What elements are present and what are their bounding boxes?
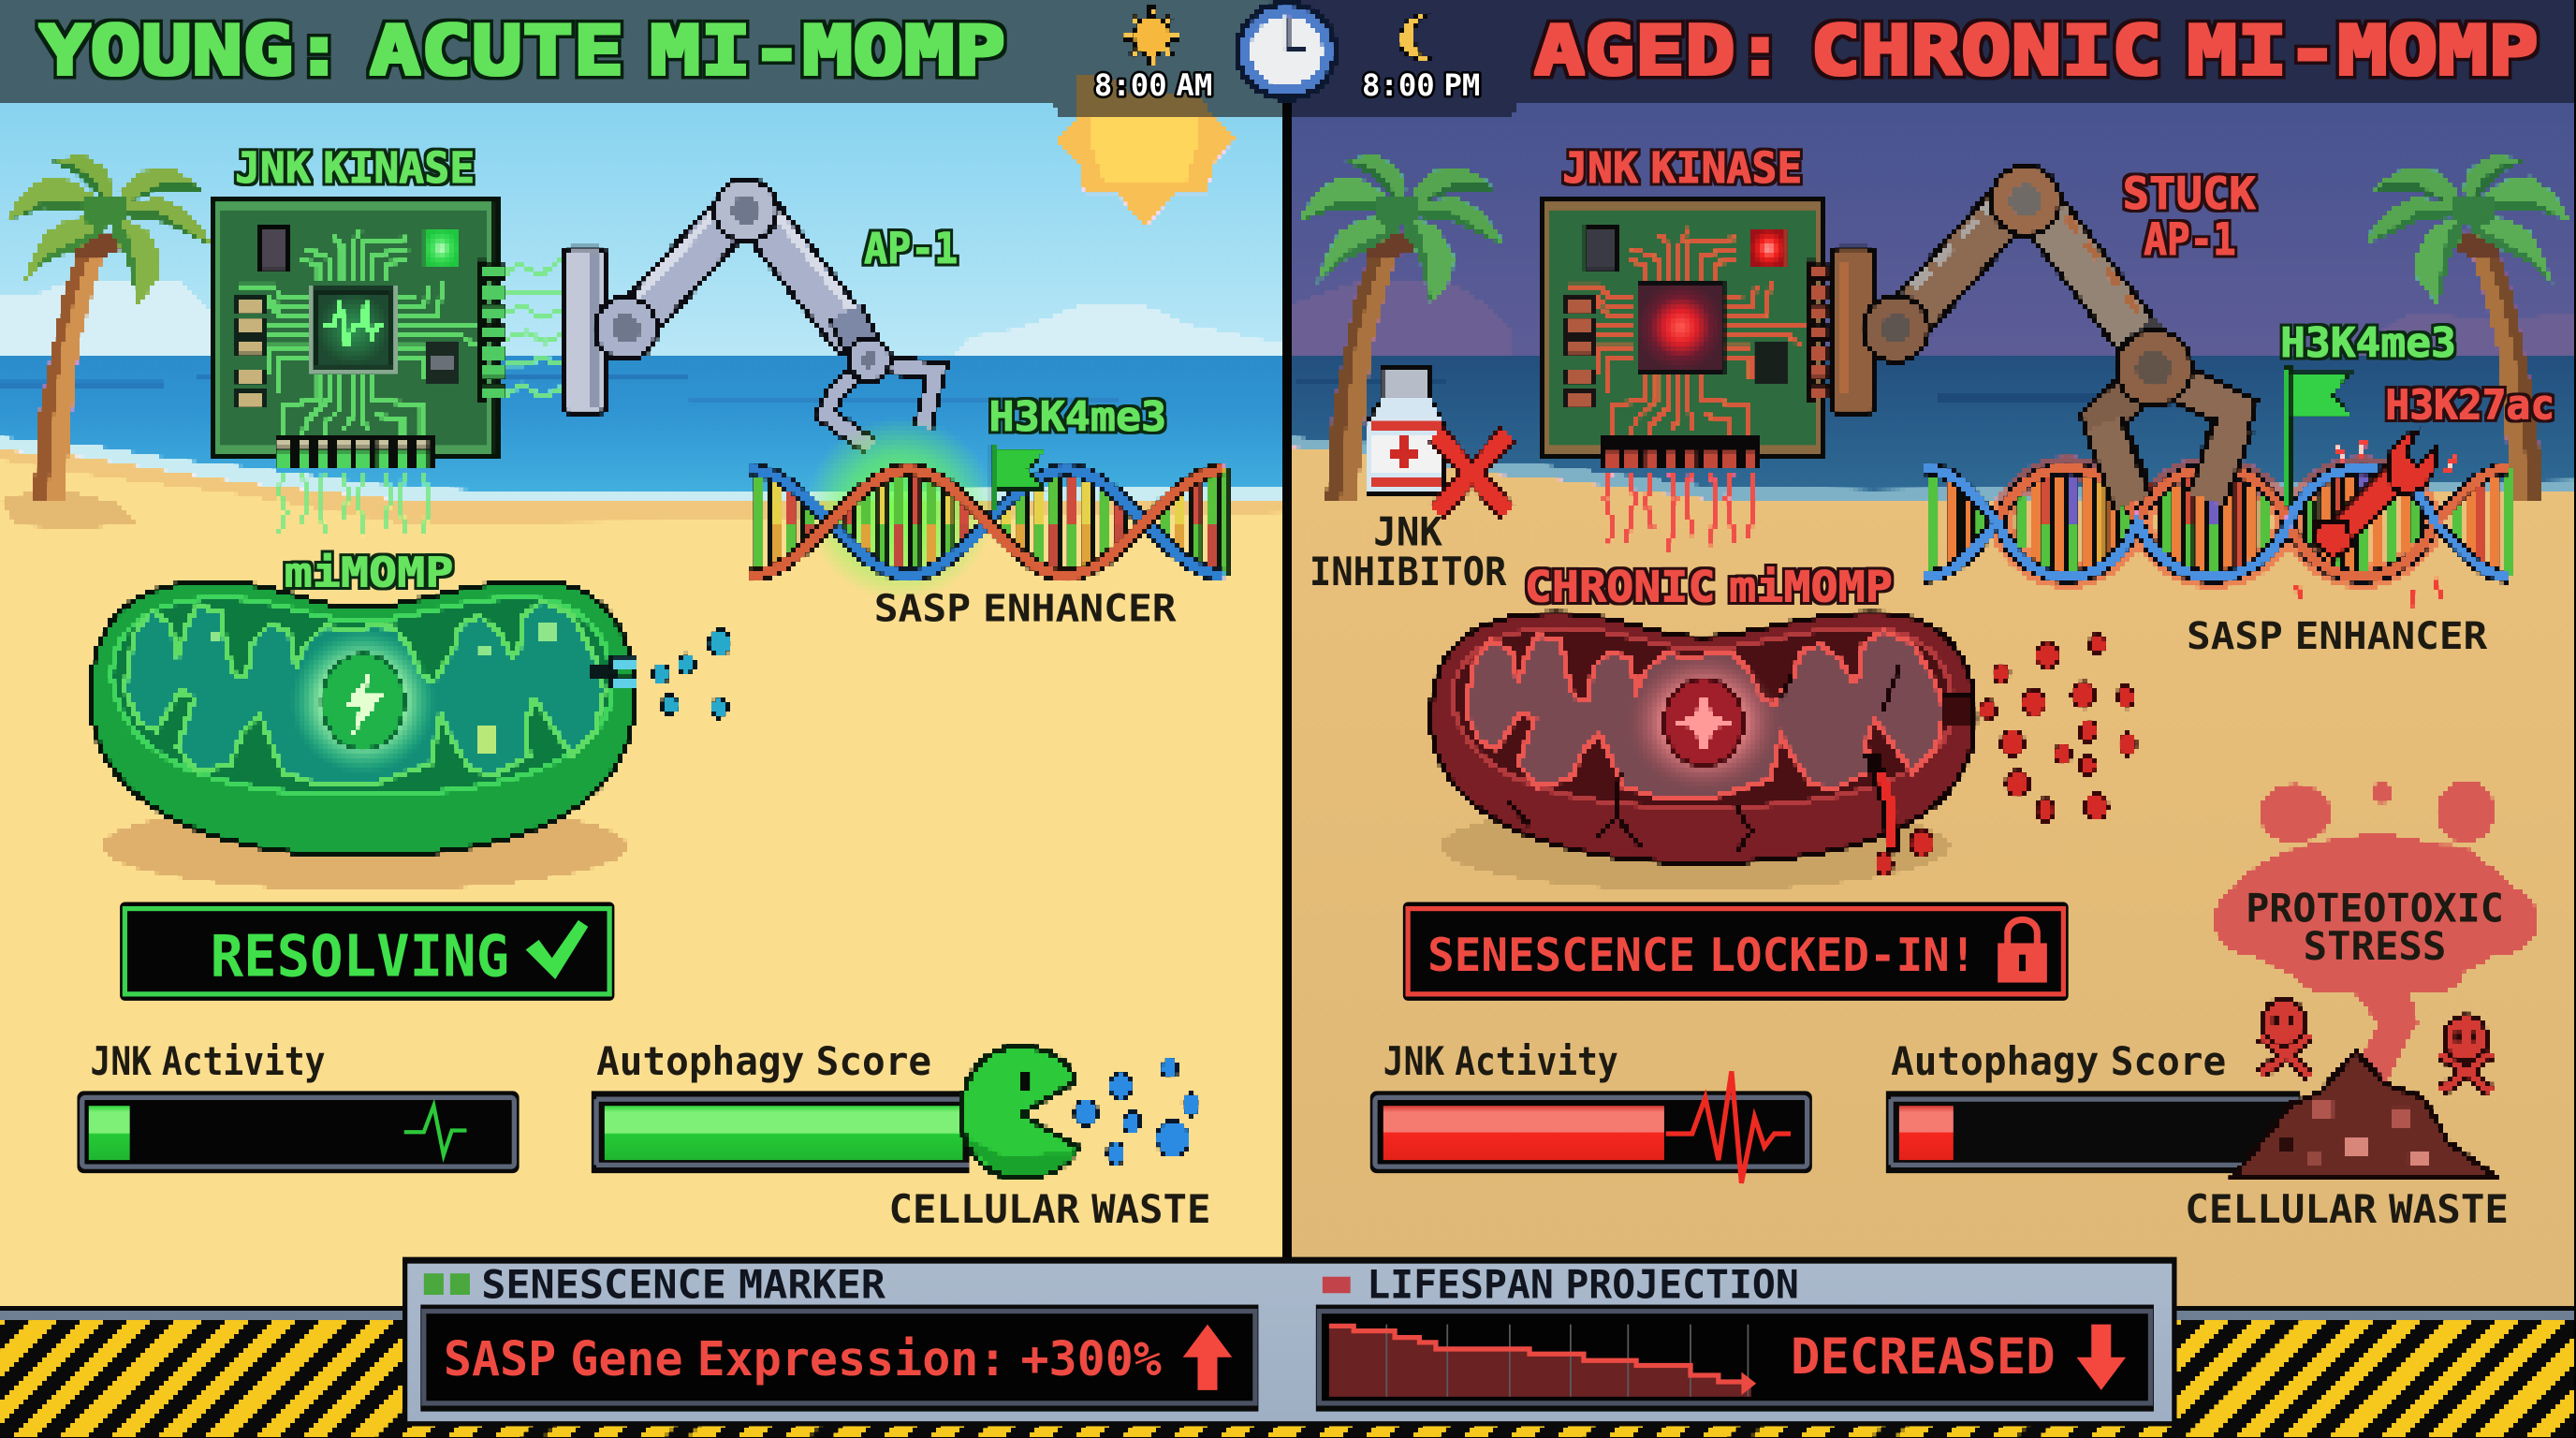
status badge: resolving: RESOLVING [211,924,509,990]
label: SASP enhancer young: SASP ENHANCER [874,586,1177,630]
label: autophagy young: Autophagy Score [596,1038,931,1084]
pixel-art overlay above gauges [961,999,2497,1178]
mtDNA particles aged [1876,634,2136,875]
chart: DNA SASP enhancer young [751,418,1224,601]
label: JNK kinase young: JNK KINASE [235,143,475,193]
label: chronic miMOMP: CHRONIC miMOMP [1525,562,1893,611]
time label: morning: 8:00 AM [1094,69,1212,103]
title: aged: AGED: CHRONIC MI-MOMP [1534,11,2539,90]
icon: lifespan small flag [1323,1277,1351,1293]
icon: green pacman [961,1047,1077,1178]
label: cloud text proteotoxic stress [2246,886,2504,969]
status badge: senescence locked-in: SENESCENCE LOCKED-IN! [1427,928,1976,982]
label: H3K4me3 young: H3K4me3 [989,393,1166,441]
icon: small sun [1123,7,1179,66]
icon: padlock [1998,919,2047,983]
sun seen through header [1076,76,1214,118]
panel: bottom console [402,1257,2177,1426]
panel: aged beach background [1284,98,2576,1308]
screen: SASP expression [420,1305,1258,1412]
screen: lifespan projection [1316,1305,2154,1412]
heading: senescence marker: SENESCENCE MARKER [481,1262,886,1308]
icon: moon [1399,13,1432,61]
label: JNK inhibitor: JNK [1373,509,1443,555]
header bar: young [0,0,1284,118]
icon: H3K4me3 flag young [990,444,1045,509]
icon: JNK inhibitor vial with red X [1367,368,1508,513]
label: cellular waste young: CELLULAR WASTE [889,1186,1211,1232]
label: autophagy aged: Autophagy Score [1891,1038,2226,1084]
icon: checkmark [526,920,588,979]
icon: skull left [2261,999,2310,1075]
gauge: autophagy aged [1886,1091,2300,1173]
gauge: autophagy young [592,1091,970,1173]
hazard stripes footer [0,1305,2576,1438]
label: miMOMP: miMOMP [285,550,453,597]
label: stuck AP-1 [2123,169,2256,266]
icon: H3K4me3 flag aged [2284,368,2351,506]
label: JNK inhibitor: INHIBITOR [1310,549,1507,594]
icon: green JNK chip [213,200,562,536]
icon: mitochondrion aged [1431,613,1975,890]
palm tree aged left [1299,154,1503,501]
icon: skull right [2441,1016,2491,1091]
icon: up arrow [1183,1325,1232,1390]
label: JNK activity aged: JNK Activity [1383,1038,1618,1084]
label: stuck AP-1: STUCK [2123,169,2256,220]
icon: proteotoxic smoke cloud [2213,781,2539,1088]
gauge: JNK activity young [77,1091,520,1173]
label: SASP enhancer aged: SASP ENHANCER [2187,614,2488,658]
time label: evening: 8:00 PM [1362,69,1480,103]
LED indicators [424,1273,470,1295]
icon: red JNK chip [1541,200,1828,552]
gauge: JNK activity aged [1370,1071,1812,1183]
label: stuck AP-1: AP-1 [2144,214,2236,266]
screen: SASP expression: SASP Gene Expression: +300% [444,1332,1162,1387]
icon: cellular waste pile [2232,1051,2497,1178]
screen: lifespan projection: DECREASED [1791,1328,2056,1386]
label: JNK kinase aged: JNK KINASE [1562,143,1802,193]
chart: DNA SASP enhancer aged [1922,468,2510,577]
icon: down arrow [2076,1325,2126,1390]
label: cloud text proteotoxic stress: PROTEOTOXIC [2246,886,2504,932]
chart: lifespan decline [1329,1325,1756,1397]
status badge: resolving [120,902,614,1001]
label: H3K4me3 aged: H3K4me3 [2280,319,2456,367]
status badge: senescence locked-in [1403,902,2069,1001]
label: cloud text proteotoxic stress: STRESS [2304,923,2446,969]
stuck claw tips over DNA [2103,424,2234,503]
waste particles young [1075,1058,1199,1165]
label: AP-1 young: AP-1 [864,224,958,273]
palm tree left scene [0,154,211,529]
palm tree aged right [2365,154,2569,501]
label: H3K27ac: H3K27ac [2385,382,2554,430]
header bar: aged [1284,0,2576,118]
robot arm: AP-1 [565,179,936,447]
title: young: YOUNG: ACUTE MI-MOMP [39,11,1005,90]
heading: lifespan projection: LIFESPAN PROJECTION [1367,1262,1799,1308]
centre divider [1283,98,1293,1262]
mtDNA particles young [652,629,731,718]
robot arm: stuck AP-1 [1832,166,2234,501]
icon: mitochondrion young [91,581,636,890]
icon: red wrench H3K27ac [2297,431,2456,607]
sun over beach [1055,118,1236,227]
label: JNK activity young: JNK Activity [91,1038,326,1084]
panel: young beach background [0,98,1288,1308]
label: cellular waste aged: CELLULAR WASTE [2185,1186,2509,1232]
label: JNK inhibitor [1310,509,1507,594]
icon: clock [1234,0,1339,102]
